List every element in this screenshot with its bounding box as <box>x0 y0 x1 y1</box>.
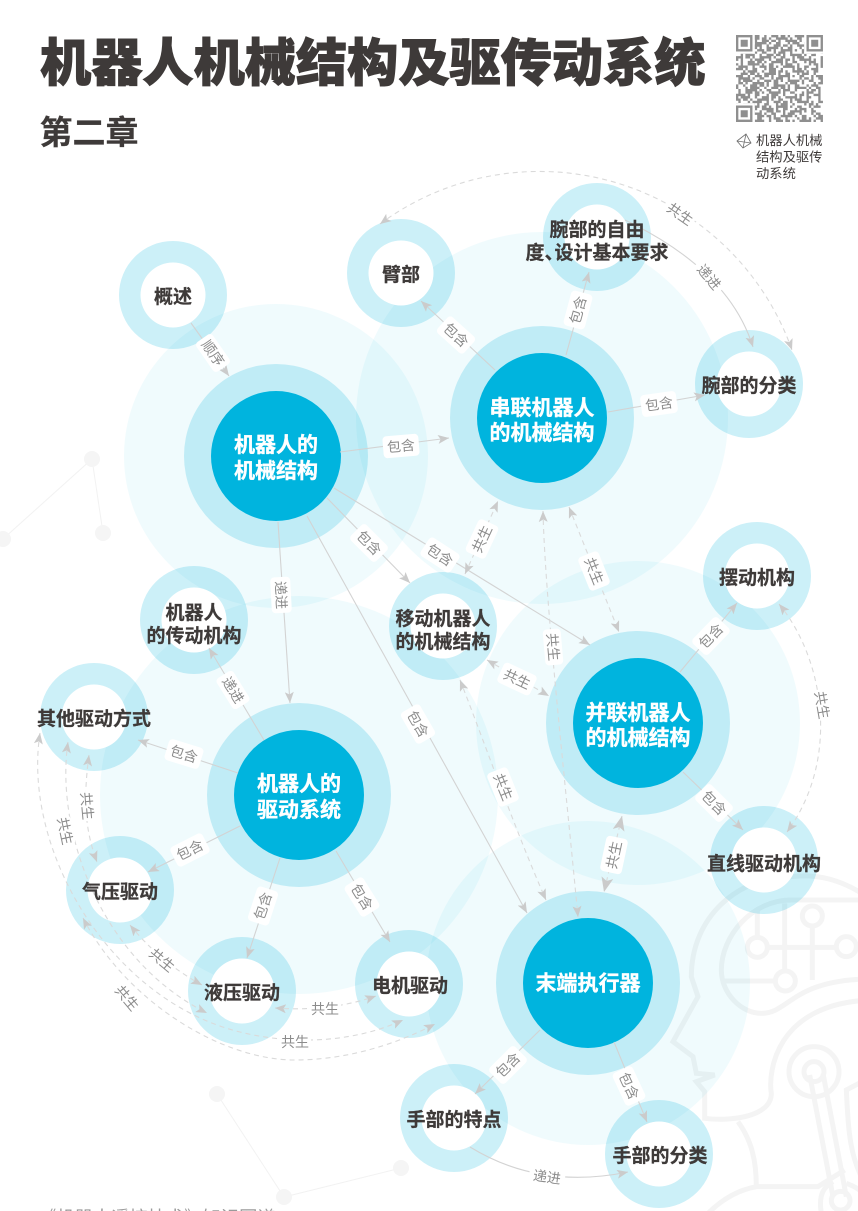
dashed: 其他 共生 液压: 共生 <box>54 816 76 846</box>
dashed: 摆动 共生 直线: 共生 <box>812 690 832 720</box>
arrow: 并联 包含 摆动 <box>680 603 737 672</box>
arrow: 末端 包含 手部分类 <box>611 1042 647 1122</box>
node: 机器人的机械结构 <box>184 364 368 548</box>
dashed: 臂部 共生 腕部分类 <box>380 171 792 350</box>
arrow: 串联 包含 臂部 <box>421 301 495 370</box>
dashed: 移动 共生 末端 <box>460 680 546 900</box>
dashed: 气压 共生 电机: 共生 <box>112 982 142 1014</box>
arrow: 概述 顺序 <box>191 323 232 376</box>
dashed: 其他 共生 电机: 共生 <box>281 1034 309 1050</box>
dashed: 摆动 共生 直线 <box>779 604 833 832</box>
dashed: 并联 共生 末端 <box>599 816 629 892</box>
node label: 移动机器人的机械结构: 移动机器人 <box>395 608 491 630</box>
dashed: 串联 共生 并联: 共生 <box>581 555 607 587</box>
node label: 电机驱动: 电机驱动 <box>372 975 448 997</box>
node circle: 移动机器人的机械结构 <box>389 572 497 680</box>
node circle: 直线驱动机构 <box>710 806 818 914</box>
node: 机器人的驱动系统: 机器人的 <box>257 773 341 796</box>
dashed: 气压 共生 电机 <box>83 918 435 1060</box>
arrow: 串联 包含 腕部自由度: 包含 <box>567 294 589 326</box>
node: 末端执行器 <box>496 891 680 1075</box>
arrow: 串联 包含 腕部分类 <box>608 391 705 417</box>
arrow: 并联 包含 摆动: 包含 <box>696 620 726 652</box>
arrow: 腕部自由度 递进 腕部分类 <box>625 220 753 347</box>
node circle: 机器人的传动机构 <box>140 566 248 674</box>
arrow: 驱动系统 包含 液压 <box>247 858 280 958</box>
arrow: 驱动系统 包含 气压: 包含 <box>174 837 206 863</box>
subtitle: 第二章 <box>40 114 138 151</box>
title: 机器人机械结构及驱传动系统 <box>40 35 705 92</box>
arrow: 驱动系统 包含 其他: 包含 <box>168 742 200 766</box>
node circle: 摆动机构 <box>703 522 811 630</box>
background constellation: bottom <box>209 1086 409 1205</box>
arrow: 腕部自由度 递进 腕部分类: 递进 <box>694 261 724 293</box>
dashed: 其他 共生 气压 <box>78 755 97 862</box>
arrow: 机械结构 包含 移动 <box>327 498 410 583</box>
node label: 腕部的分类: 腕部的分类 <box>701 374 797 397</box>
node label: 机器人的传动机构: 的传动机构 <box>146 625 242 647</box>
arrow: 机械结构 包含 串联 <box>340 433 449 459</box>
node label: 气压驱动: 气压驱动 <box>82 881 158 903</box>
background constellation: left <box>0 451 111 547</box>
dashed: 串联 共生 并联 <box>569 507 619 632</box>
arrow: 特点 递进 手部分类: 递进 <box>532 1167 562 1187</box>
arrow: 驱动系统 包含 电机 <box>336 851 390 942</box>
dashed: 液压 共生 电机: 共生 <box>311 1001 339 1017</box>
arrow: 机械结构 递进 驱动系统: 递进 <box>272 581 290 609</box>
dashed: 气压 共生 液压 <box>130 925 202 985</box>
node circle: 手部的特点 <box>400 1064 508 1172</box>
node label: 腕部的自由度、设计基本要求: 度、设计基本要求 <box>525 241 669 264</box>
node circle: 手部的分类 <box>605 1100 713 1208</box>
node circle: 腕部的自由度 <box>543 183 651 291</box>
dashed: 移动 共生 并联 <box>487 660 549 697</box>
dashed: 臂部 共生 腕部分类: 共生 <box>664 199 696 229</box>
arrow: 末端 包含 手部分类: 包含 <box>616 1070 642 1102</box>
dashed: 其他 共生 电机 <box>38 733 403 1051</box>
node label: 直线驱动机构: 直线驱动机构 <box>707 853 821 875</box>
node circle: 电机驱动 <box>355 930 463 1038</box>
dashed: 移动 共生 串联: 共生 <box>469 523 495 555</box>
node: 机器人的机械结构: 机器人的 <box>234 434 318 457</box>
arrow: 机械结构 包含 串联: 包含 <box>386 437 416 455</box>
node label: 概述: 概述 <box>154 286 192 308</box>
node circle: 臂部 <box>347 219 455 327</box>
node label: 手部的分类: 手部的分类 <box>612 1144 708 1167</box>
node circle: 其他驱动方式 <box>40 663 148 771</box>
arrow: 串联 包含 腕部自由度 <box>563 272 593 355</box>
dashed: 液压 共生 电机 <box>275 996 376 1018</box>
node label: 移动机器人的机械结构: 的机械结构 <box>395 631 491 653</box>
node: 机器人的驱动系统: 驱动系统 <box>257 798 341 822</box>
node label: 液压驱动: 液压驱动 <box>204 982 280 1004</box>
dashed: 移动 共生 末端: 共生 <box>490 771 516 803</box>
node label: 机器人的传动机构: 机器人 <box>165 602 223 624</box>
arrow: 驱动系统 包含 气压 <box>148 826 240 872</box>
arrow: 驱动系统 包含 液压: 包含 <box>251 890 275 922</box>
icon: network cube <box>737 134 751 148</box>
arrow: 机械结构 包含 末端: 包含 <box>404 708 432 740</box>
arrow: 驱动系统 包含 其他 <box>138 738 238 773</box>
node circle: 气压驱动 <box>66 836 174 944</box>
QR caption: 机器人机械 <box>756 133 822 148</box>
arrow: 串联 包含 腕部分类: 包含 <box>644 394 674 414</box>
dashed: 其他 共生 液压 <box>54 742 207 1013</box>
arrow: 机械结构 包含 末端 <box>307 516 527 913</box>
QR caption <box>756 133 822 181</box>
arrow: 串联 包含 臂部: 包含 <box>440 320 472 350</box>
arrow: 末端 包含 特点 <box>475 1030 540 1094</box>
node: 串联机器人的机械结构: 串联机器人 <box>490 397 594 420</box>
node: 并联机器人的机械结构 <box>546 631 730 815</box>
node: 并联机器人的机械结构: 的机械结构 <box>586 727 690 750</box>
arrow: 并联 包含 直线 <box>683 772 743 830</box>
QR caption: 结构及驱传 <box>756 150 822 164</box>
node: 末端执行器: 末端执行器 <box>536 972 640 996</box>
dashed: 并联 共生 末端: 共生 <box>603 840 625 870</box>
arrow: 驱动系统 递进 传动机构: 递进 <box>219 674 247 706</box>
arrow: 并联 包含 直线: 包含 <box>698 787 730 819</box>
QR caption: 动系统 <box>756 166 796 181</box>
node label: 手部的特点: 手部的特点 <box>406 1108 502 1131</box>
arrow: 机械结构 包含 并联: 包含 <box>424 541 456 569</box>
node label: 移动机器人的机械结构 <box>395 608 491 653</box>
node label: 摆动机构: 摆动机构 <box>719 567 795 589</box>
node: 机器人的驱动系统 <box>207 703 391 887</box>
node: 串联机器人的机械结构 <box>450 326 634 510</box>
node label: 腕部的自由度、设计基本要求: 腕部的自由 <box>549 218 645 241</box>
background icon: robot head outline <box>673 876 858 1211</box>
dashed: 其他 共生 气压: 共生 <box>78 791 96 821</box>
dashed: 移动 共生 并联: 共生 <box>501 666 533 692</box>
arrow: 特点 递进 手部分类 <box>470 1147 628 1189</box>
dashed: 气压 共生 液压: 共生 <box>146 945 178 975</box>
arrow: 机械结构 包含 并联 <box>334 488 590 645</box>
dashed: 移动 共生 串联 <box>464 501 500 574</box>
node label: 其他驱动方式: 其他驱动方式 <box>37 707 151 730</box>
dashed: 串联 共生 末端: 共生 <box>544 632 562 662</box>
QR code <box>736 35 823 122</box>
dashed: 串联 共生 末端 <box>542 511 578 917</box>
arrow: 驱动系统 包含 电机: 包含 <box>348 881 376 913</box>
node circle: 概述 <box>119 241 227 349</box>
arrow: 机械结构 递进 驱动系统 <box>270 522 292 703</box>
node: 串联机器人的机械结构: 的机械结构 <box>490 422 594 445</box>
node: 机器人的机械结构: 机械结构 <box>234 460 318 483</box>
arrow: 概述 顺序: 顺序 <box>198 337 228 369</box>
node circle: 液压驱动 <box>188 937 296 1045</box>
node label: 臂部: 臂部 <box>382 263 420 286</box>
node circle: 腕部的分类 <box>695 330 803 438</box>
halos behind main nodes <box>100 232 800 1145</box>
node label: 腕部的自由度、设计基本要求 <box>525 218 669 264</box>
arrow: 机械结构 包含 移动: 包含 <box>353 527 385 559</box>
node: 并联机器人的机械结构: 并联机器人 <box>586 702 690 725</box>
arrow: 驱动系统 递进 传动机构 <box>209 648 264 740</box>
arrow: 末端 包含 特点: 包含 <box>492 1049 524 1081</box>
node label: 机器人的传动机构 <box>146 602 242 647</box>
